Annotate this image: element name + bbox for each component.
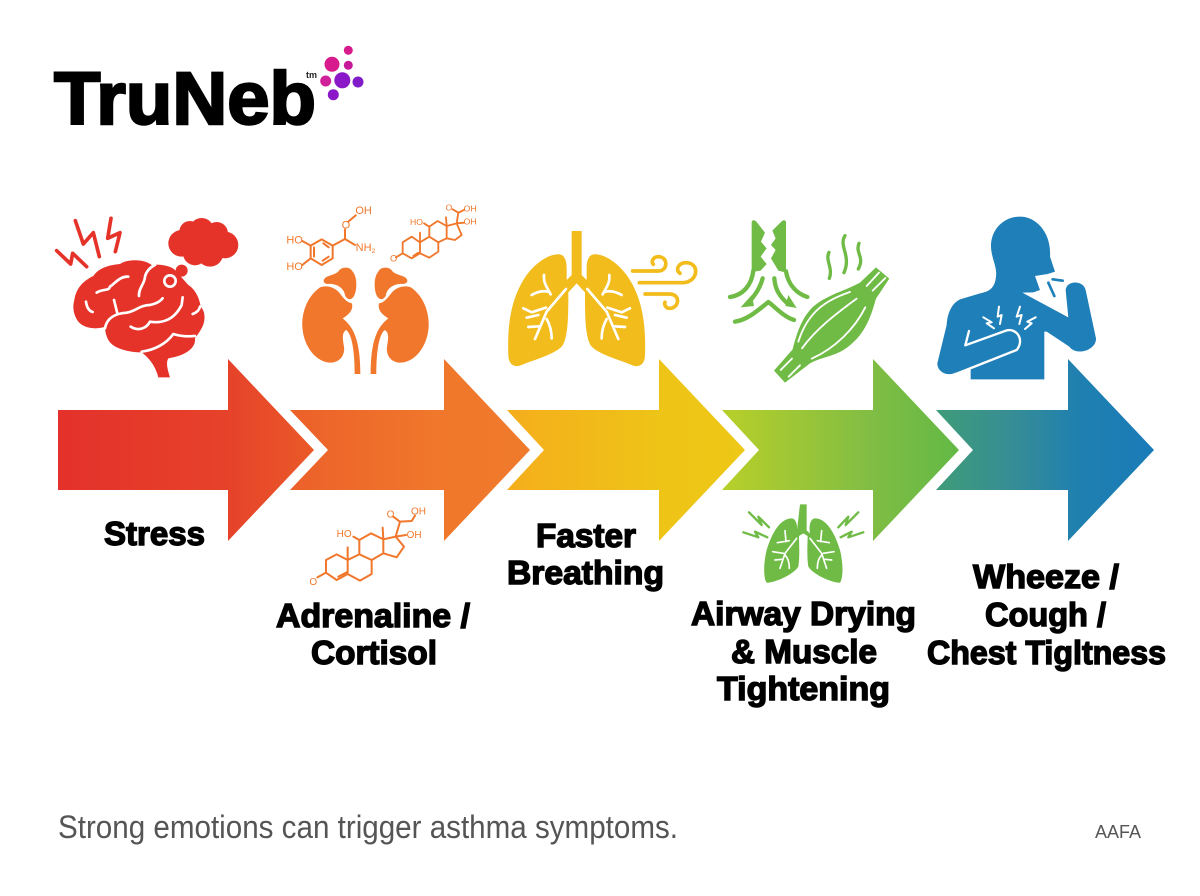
icon: adrenaline molecule: HO	[286, 261, 303, 273]
icon: cortisol molecule upper	[390, 203, 477, 264]
label: Faster Breathing: Breathing	[507, 554, 664, 591]
icon: cortisol molecule upper: OH	[464, 203, 477, 213]
label: Airway Drying & Muscle Tightening	[691, 595, 916, 707]
icon: cortisol molecule upper: O	[390, 254, 397, 264]
icon: cortisol molecule lower	[309, 506, 426, 588]
label: Faster Breathing: Faster	[536, 517, 636, 554]
icon: adrenaline molecule: 2	[372, 248, 376, 255]
label: Adrenaline / Cortisol: Adrenaline /	[276, 597, 470, 634]
footer caption: Strong emotions can trigger asthma symptoms.	[58, 809, 678, 845]
icon: kidneys with adrenal glands	[302, 268, 429, 374]
source credit: AAFA	[1095, 822, 1141, 842]
icon: adrenaline molecule: OH	[355, 205, 372, 217]
icon: stressed brain with thought cloud and lightning	[57, 218, 238, 377]
process arrows	[58, 359, 1154, 541]
label: Adrenaline / Cortisol	[276, 597, 470, 671]
logo: TruNeb: TruNeb	[54, 57, 316, 140]
icon: cortisol molecule lower: O	[387, 510, 395, 521]
label: Stress: Stress	[104, 515, 205, 552]
label: Adrenaline / Cortisol: Cortisol	[311, 634, 437, 671]
label: Wheeze / Cough / Chest Tigltness: Cough /	[985, 596, 1106, 633]
label: Airway Drying & Muscle Tightening: Airway Drying	[691, 595, 916, 632]
label: Airway Drying & Muscle Tightening: Tightening	[717, 670, 890, 707]
icon: cortisol molecule lower: O	[309, 577, 317, 588]
icon: adrenaline molecule: NH	[356, 242, 372, 254]
label: Airway Drying & Muscle Tightening: & Muscle	[731, 633, 877, 670]
icon: adrenaline molecule	[286, 205, 376, 273]
label: Faster Breathing	[507, 517, 664, 591]
icon: cortisol molecule upper: O	[446, 203, 453, 213]
label: Wheeze / Cough / Chest Tigltness: Chest Tigltness	[927, 634, 1166, 671]
icon: adrenaline molecule: HO	[286, 234, 303, 246]
label: Wheeze / Cough / Chest Tigltness: Wheeze /	[973, 558, 1119, 595]
icon: cortisol molecule upper: HO	[410, 217, 423, 227]
icon: cortisol molecule upper: OH	[464, 217, 477, 227]
icon: cortisol molecule lower: OH	[407, 530, 422, 541]
icon: adrenaline molecule: O	[342, 220, 351, 232]
icon: cortisol molecule lower: HO	[337, 529, 352, 540]
label: Wheeze / Cough / Chest Tigltness	[927, 558, 1166, 671]
icon: small lungs with sparks	[743, 504, 863, 583]
icon: cortisol molecule lower: OH	[411, 506, 426, 517]
logo: TruNeb: tm	[306, 70, 317, 80]
icon: lungs with wind	[508, 231, 696, 366]
icon: coughing person	[937, 217, 1096, 379]
icon: narrowed airway and tight muscle	[730, 220, 889, 383]
